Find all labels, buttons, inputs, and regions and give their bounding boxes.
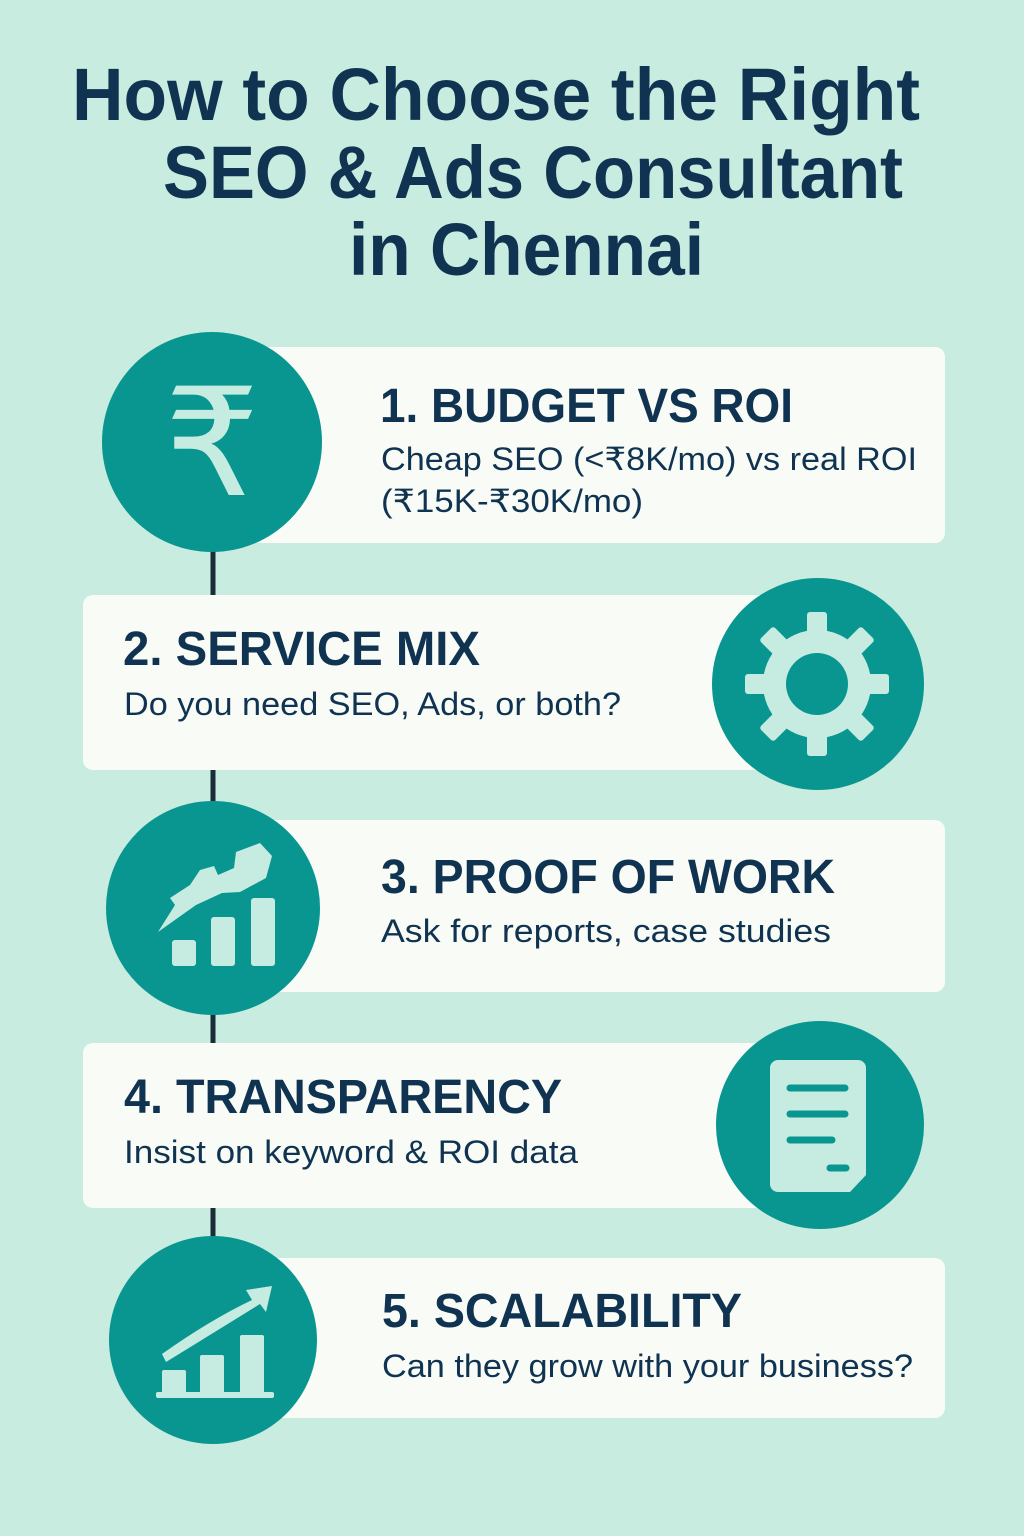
panel: transparency	[83, 1021, 924, 1229]
panel: transparency: 4. TRANSPARENCY	[124, 1071, 562, 1124]
panel: transparency: Insist on keyword & ROI data	[124, 1134, 578, 1170]
panel: proof of work	[106, 801, 945, 1015]
panel: scalability: Can they grow with your business?	[382, 1348, 913, 1384]
panel: scalability: 5. SCALABILITY	[382, 1285, 742, 1338]
icon: rupee	[102, 332, 322, 552]
title: in Chennai	[349, 208, 704, 291]
panel: budget vs roi: (₹15K-₹30K/mo)	[381, 483, 643, 519]
panel: budget vs roi: Cheap SEO (<₹8K/mo) vs real ROI	[381, 441, 917, 477]
panel: proof of work: 3. PROOF OF WORK	[381, 851, 835, 904]
title: SEO & Ads Consultant	[163, 131, 903, 214]
icon: chart with trend	[106, 801, 320, 1015]
icon: growth chart	[109, 1236, 317, 1444]
panel: service mix	[83, 578, 924, 790]
panel: proof of work: Ask for reports, case studies	[381, 913, 831, 949]
icon: gear	[712, 578, 924, 790]
panel: budget vs roi: 1. BUDGET VS ROI	[380, 380, 793, 433]
title	[72, 53, 920, 291]
panel: budget vs roi	[102, 332, 945, 552]
connector line	[210, 545, 216, 1240]
panel: service mix: 2. SERVICE MIX	[123, 623, 480, 676]
icon: rupee: ₹	[164, 359, 260, 527]
panel: service mix: Do you need SEO, Ads, or both?	[124, 686, 621, 722]
panel: scalability	[109, 1236, 945, 1444]
icon: document	[716, 1021, 924, 1229]
title: How to Choose the Right	[72, 53, 920, 136]
